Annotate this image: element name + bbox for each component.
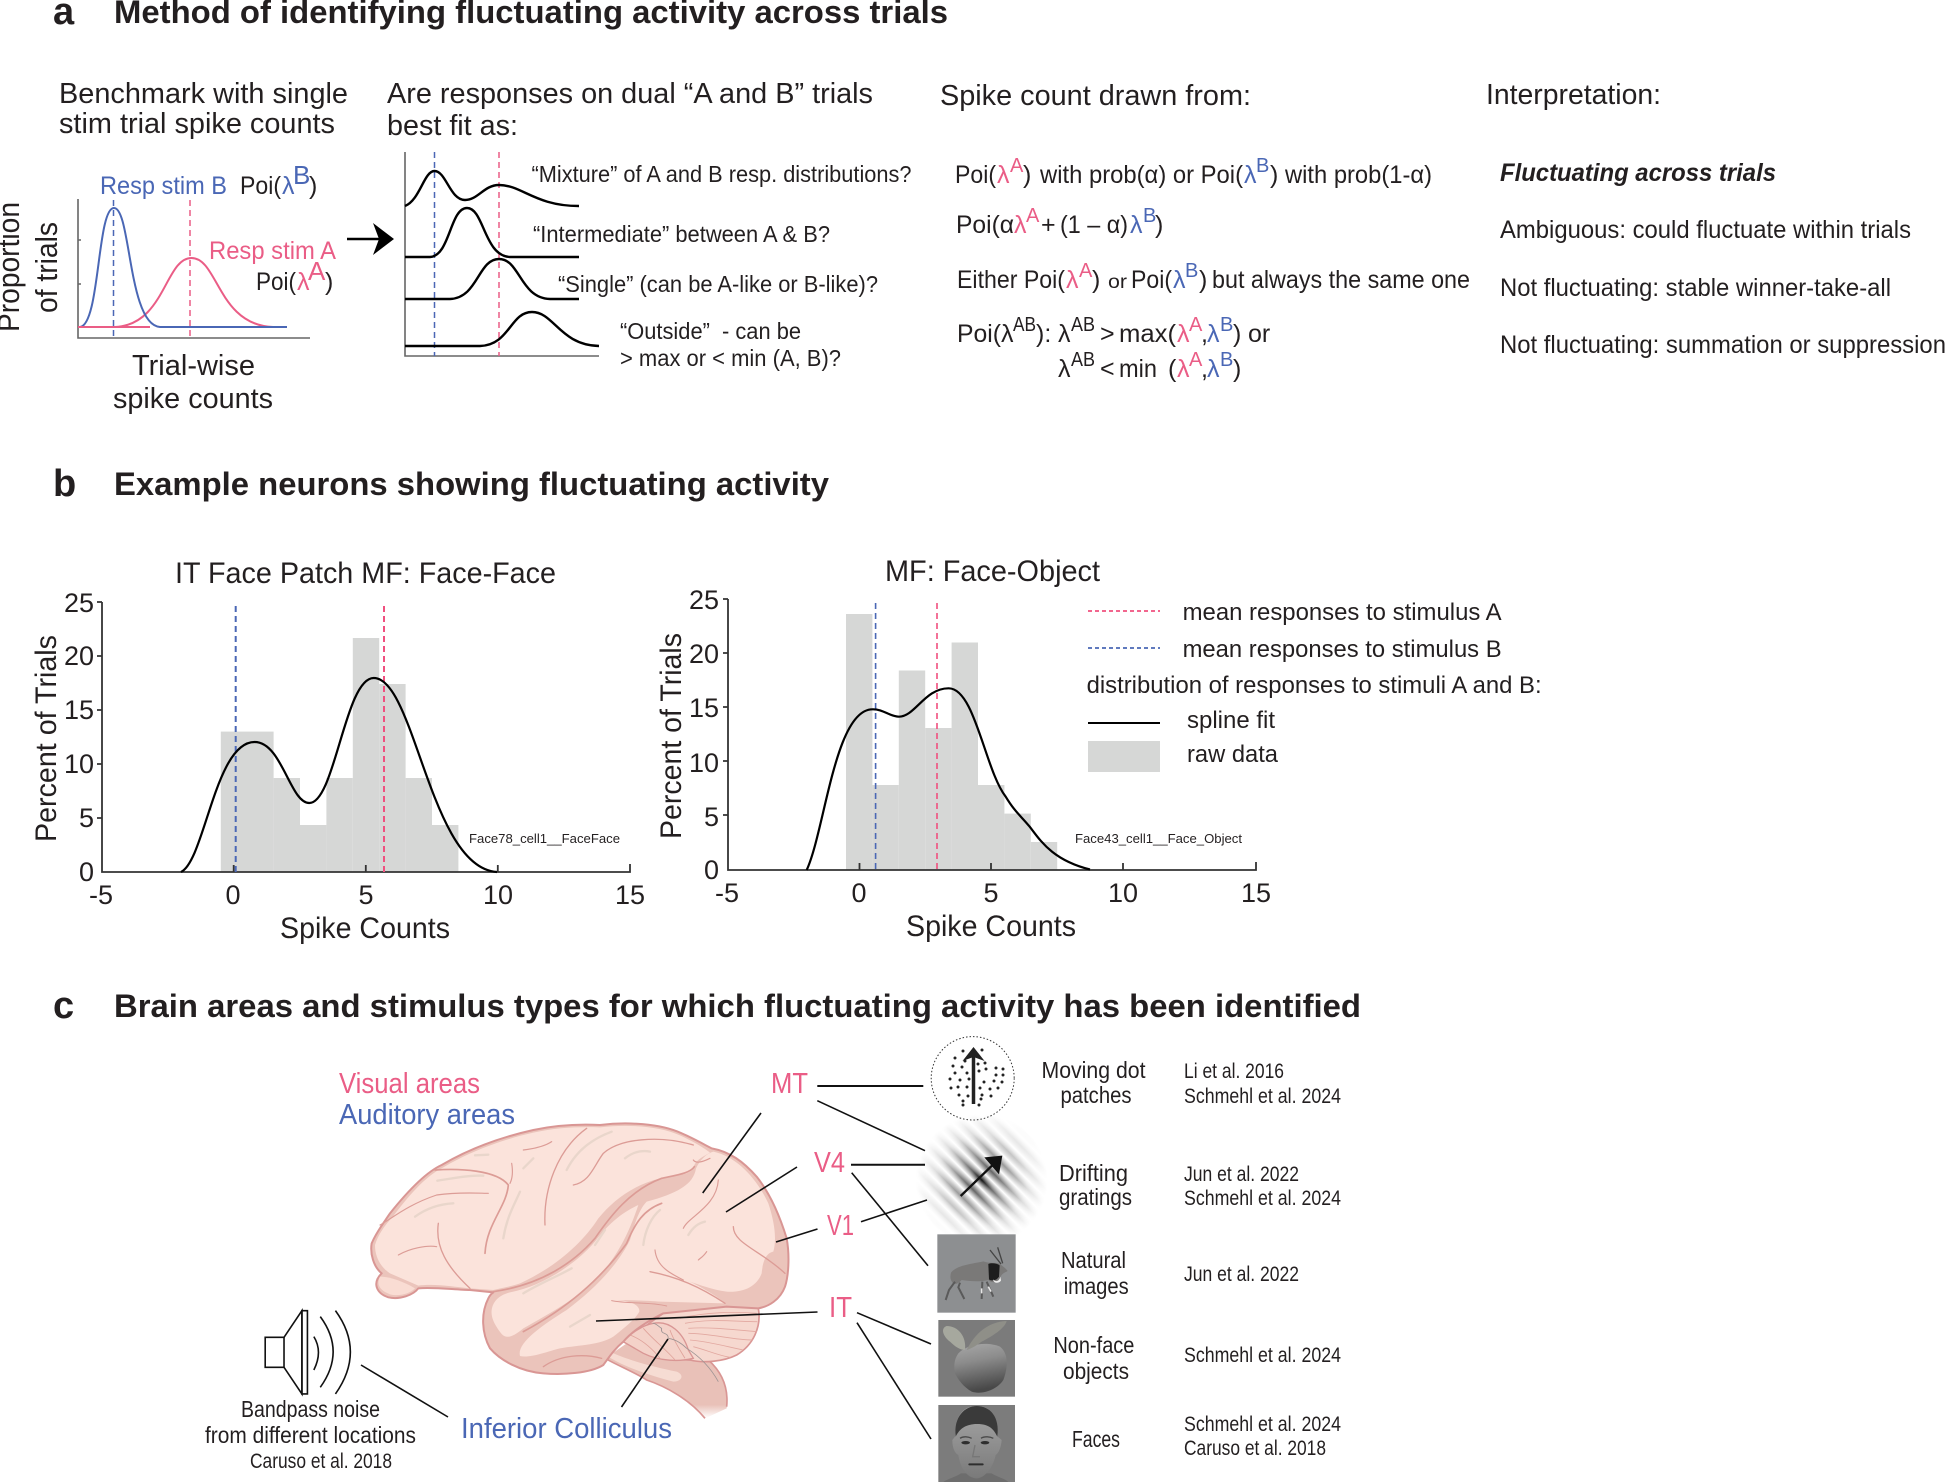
formula: intermediate: (1 – α) xyxy=(1060,211,1128,239)
y tick labels xyxy=(689,585,719,885)
references xyxy=(1184,1060,1341,1460)
formula: outside: AB xyxy=(1071,349,1095,371)
label: resp stim A: λ xyxy=(297,268,310,296)
formula: outside: λ xyxy=(1207,320,1220,348)
area labels: MT xyxy=(771,1068,808,1100)
label: resp stim A: Poi( xyxy=(256,268,297,296)
formula: intermediate: A xyxy=(1026,205,1040,227)
subheading: dual trials: best fit as: xyxy=(387,110,518,142)
hypothesis labels: “Mixture” of A and B resp. distributions? xyxy=(532,161,912,187)
x tick labels: 5 xyxy=(983,878,999,908)
references: Caruso et al. 2018 xyxy=(1184,1437,1326,1460)
label: resp stim B xyxy=(100,160,317,200)
interpretation list xyxy=(1500,159,1946,359)
formula: outside: B xyxy=(1220,314,1233,336)
formula: outside: max( xyxy=(1119,320,1177,348)
panel letter c: c xyxy=(53,985,74,1027)
interpretation list: Not fluctuating: stable winner-take-all xyxy=(1500,274,1891,302)
references: Schmehl et al. 2024 xyxy=(1184,1344,1341,1367)
legend: area colours xyxy=(339,1068,515,1131)
hypothesis labels: “Outside” - can be xyxy=(620,318,801,344)
occipital and temporal regions xyxy=(520,1152,775,1356)
formula: intermediate: Poi(α xyxy=(956,211,1014,239)
label: resp stim A: ) xyxy=(325,268,333,296)
formula: single: ) xyxy=(1092,266,1100,294)
axes xyxy=(97,602,630,872)
formula: outside: AB xyxy=(1013,314,1036,336)
stimulus labels: images xyxy=(1064,1273,1129,1299)
panel: b example neurons xyxy=(30,463,1542,945)
y tick labels: 0 xyxy=(79,857,94,887)
stimulus: non-face object xyxy=(938,1320,1015,1397)
chart: single stimulus distributions xyxy=(78,199,310,338)
label: resp stim B: ) xyxy=(309,172,317,200)
cell id: Face43_cell1__Face_Object xyxy=(1075,831,1242,846)
y axis label: proportion of trials: of trials xyxy=(29,222,64,313)
formula: mixture: with prob(1-α) xyxy=(1284,161,1432,189)
formula: outside: or xyxy=(1248,320,1270,348)
y tick labels xyxy=(64,588,94,887)
interpretation list: Fluctuating across trials xyxy=(1500,159,1776,187)
caption: bandpass noise: from different locations xyxy=(205,1422,416,1448)
chart title: MF: Face-Object xyxy=(885,555,1101,588)
stimulus labels: Natural xyxy=(1061,1247,1126,1273)
stimulus labels: patches xyxy=(1060,1082,1132,1108)
references: Jun et al. 2022 xyxy=(1184,1263,1299,1286)
formula: mixture: A xyxy=(1010,155,1024,177)
formula: single xyxy=(957,260,1470,294)
formula: mixture: with prob(α) or Poi( xyxy=(1039,161,1244,189)
formula: single: B xyxy=(1185,260,1198,282)
references: Schmehl et al. 2024 xyxy=(1184,1187,1341,1210)
stimulus labels: Drifting xyxy=(1059,1160,1128,1186)
formula: outside: λ xyxy=(1207,355,1220,383)
references: Li et al. 2016 xyxy=(1184,1060,1284,1083)
formula: intermediate: B xyxy=(1143,205,1156,227)
y axis title: Percent of Trials xyxy=(30,635,63,842)
formula: outside: , xyxy=(1201,355,1208,383)
y tick labels: 25 xyxy=(64,588,94,618)
formula: intermediate: λ xyxy=(1014,211,1027,239)
y tick labels: 20 xyxy=(689,639,719,669)
area labels: IT xyxy=(829,1292,852,1324)
arrow xyxy=(347,223,394,255)
formula: mixture xyxy=(955,155,1432,189)
connector lines: areas to brain xyxy=(361,1113,818,1417)
y tick labels: 5 xyxy=(79,803,94,833)
area labels xyxy=(771,1068,854,1324)
formula: outside: , xyxy=(1201,320,1208,348)
formula: outside: ) xyxy=(1233,320,1241,348)
formula: outside: B xyxy=(1220,349,1233,371)
legend: mean responses to stimulus A xyxy=(1183,599,1502,626)
label: resp stim A: A xyxy=(308,256,326,286)
x tick labels: -5 xyxy=(715,878,739,908)
area labels: V4 xyxy=(814,1147,845,1179)
stimulus labels: objects xyxy=(1063,1358,1129,1384)
subheading: benchmark xyxy=(59,78,348,140)
caption: bandpass noise xyxy=(205,1396,416,1473)
x tick labels: 15 xyxy=(615,880,645,910)
connector lines: areas to stimuli xyxy=(817,1086,931,1439)
formula: outside: AB xyxy=(1071,314,1095,336)
stimulus labels: Non-face xyxy=(1053,1332,1134,1358)
subheading: interpretation: Interpretation: xyxy=(1486,79,1661,111)
x tick labels: 10 xyxy=(1108,878,1138,908)
formula: outside: λ xyxy=(1177,320,1190,348)
subheading: benchmark: Benchmark with single xyxy=(59,78,348,110)
label: resp stim A xyxy=(209,237,336,296)
chart: face-face histogram xyxy=(30,557,645,945)
formula: outside: λ xyxy=(1058,320,1071,348)
formula: mixture: ) xyxy=(1023,161,1031,189)
formula: mixture: λ xyxy=(997,161,1010,189)
subheading: spike count: Spike count drawn from: xyxy=(940,80,1251,112)
stimulus labels: Moving dot xyxy=(1042,1057,1146,1083)
references: Jun et al. 2022 xyxy=(1184,1163,1299,1186)
formula: outside: min xyxy=(1119,355,1157,383)
y tick labels: 5 xyxy=(704,802,719,832)
hypothesis labels: “Single” (can be A-like or B-like)? xyxy=(558,271,878,297)
y tick labels: 15 xyxy=(64,695,94,725)
caption: bandpass noise: Caruso et al. 2018 xyxy=(250,1450,392,1473)
x tick labels xyxy=(89,880,645,910)
stimulus: face xyxy=(938,1405,1015,1482)
label: resp stim B: Resp stim B xyxy=(100,172,227,200)
x tick labels: 0 xyxy=(225,880,241,910)
stimulus labels: Faces xyxy=(1072,1426,1120,1452)
label: resp stim A: Resp stim A xyxy=(209,237,336,265)
legend: spline fit xyxy=(1187,707,1275,734)
x tick labels: 15 xyxy=(1241,878,1271,908)
y axis title: Percent of Trials xyxy=(655,633,688,839)
chart title: IT Face Patch MF: Face-Face xyxy=(175,557,556,590)
x tick labels: -5 xyxy=(89,880,113,910)
stimulus: moving dots xyxy=(931,1037,1014,1120)
panel letter b: b xyxy=(53,463,76,505)
formula: outside: > xyxy=(1100,320,1115,348)
formula: mixture: ) xyxy=(1270,161,1278,189)
formula: outside: A xyxy=(1189,349,1203,371)
histogram bars xyxy=(221,638,458,872)
axes xyxy=(723,599,1256,870)
x tick labels xyxy=(715,878,1271,908)
formula: outside: ) xyxy=(1233,355,1241,383)
stimulus labels xyxy=(1042,1057,1146,1452)
references: Schmehl et al. 2024 xyxy=(1184,1085,1341,1108)
legend: raw data xyxy=(1187,741,1279,768)
legend xyxy=(1087,599,1542,772)
x tick labels: 5 xyxy=(358,880,374,910)
hypothesis labels xyxy=(532,161,912,371)
stimulus labels: gratings xyxy=(1059,1184,1132,1210)
formula: outside: A xyxy=(1189,314,1203,336)
formula: outside: λ xyxy=(1177,355,1190,383)
panel: a method xyxy=(0,0,1946,415)
formula: single: ) xyxy=(1199,266,1207,294)
y tick labels: 20 xyxy=(64,641,94,671)
x axis label: trial-wise spike counts: Trial-wise xyxy=(132,350,255,382)
subheading: benchmark: stim trial spike counts xyxy=(59,108,335,140)
chart: dual trial hypotheses xyxy=(405,152,599,356)
x tick labels: 10 xyxy=(483,880,513,910)
x axis title: Spike Counts xyxy=(906,910,1076,943)
x tick labels: 0 xyxy=(851,878,867,908)
formula: outside: Poi( xyxy=(957,320,1002,348)
formula: outside: ( xyxy=(1168,355,1177,383)
formula: intermediate: ) xyxy=(1155,211,1163,239)
formula: mixture: λ xyxy=(1244,161,1257,189)
spline fit xyxy=(181,678,497,872)
formula: single: λ xyxy=(1173,266,1186,294)
x axis label: trial-wise spike counts xyxy=(113,350,273,415)
y tick labels: 10 xyxy=(64,749,94,779)
mean lines xyxy=(236,606,384,872)
stimulus: drifting grating xyxy=(920,1119,1042,1234)
formula: mixture: Poi( xyxy=(955,161,997,189)
formula: outside: λ xyxy=(1001,320,1014,348)
x axis title: Spike Counts xyxy=(280,912,450,945)
heading c: Brain areas and stimulus types for which fluctuating activity has been identified xyxy=(114,988,1361,1024)
x axis label: trial-wise spike counts: spike counts xyxy=(113,383,273,415)
sulci xyxy=(380,1128,785,1367)
formula: single: Poi( xyxy=(1131,266,1173,294)
formula: outside: λ xyxy=(1058,355,1071,383)
subheading: dual trials xyxy=(387,78,873,142)
y axis label: proportion of trials xyxy=(0,202,64,332)
formula: single: Either Poi( xyxy=(957,266,1066,294)
formula: outside xyxy=(957,314,1270,383)
label: resp stim B: B xyxy=(293,160,310,190)
legend: distribution of responses to stimuli A and B: xyxy=(1087,672,1542,699)
caption: bandpass noise: Bandpass noise xyxy=(241,1396,380,1422)
hypothesis labels: > max or < min (A, B)? xyxy=(620,345,841,371)
cell id: Face78_cell1__FaceFace xyxy=(469,831,620,846)
formula: outside: < xyxy=(1100,355,1115,383)
legend: area colours: Auditory areas xyxy=(339,1099,515,1131)
formula: single: A xyxy=(1079,260,1093,282)
label: resp stim B: λ xyxy=(282,172,295,200)
label: inferior colliculus: Inferior Colliculus xyxy=(461,1413,672,1445)
cerebrum silhouette xyxy=(371,1123,788,1374)
y tick labels: 10 xyxy=(689,748,719,778)
illustration: brain xyxy=(371,1123,788,1418)
legend: area colours: Visual areas xyxy=(339,1068,480,1100)
heading b: Example neurons showing fluctuating activity xyxy=(114,466,829,502)
y tick labels: 15 xyxy=(689,693,719,723)
formula: intermediate xyxy=(956,205,1163,239)
mean lines xyxy=(876,603,937,870)
area labels: V1 xyxy=(827,1210,854,1242)
spline fit xyxy=(807,688,1090,870)
formula: intermediate: λ xyxy=(1130,211,1143,239)
panel: c brain areas xyxy=(53,985,1361,1482)
histogram bars xyxy=(846,614,1057,870)
stimulus: natural image xyxy=(937,1234,1016,1313)
references: Schmehl et al. 2024 xyxy=(1184,1413,1341,1436)
interpretation list: Ambiguous: could fluctuate within trials xyxy=(1500,216,1911,244)
formula: single: or xyxy=(1108,272,1128,293)
legend: mean responses to stimulus B xyxy=(1183,636,1502,663)
label: resp stim B: Poi( xyxy=(240,172,282,200)
y tick labels: 25 xyxy=(689,585,719,615)
formula: single: but always the same one xyxy=(1212,266,1470,294)
y tick labels: 0 xyxy=(704,855,719,885)
formula: single: λ xyxy=(1066,266,1079,294)
hypothesis labels: “Intermediate” between A & B? xyxy=(533,221,830,247)
icon: speaker xyxy=(265,1311,350,1394)
chart: face-object histogram xyxy=(655,555,1271,943)
formula: outside: ): xyxy=(1036,320,1051,348)
subheading: dual trials: Are responses on dual “A and B” trials xyxy=(387,78,873,110)
frontal and parietal lobes xyxy=(375,1126,710,1290)
formula: mixture: B xyxy=(1256,155,1269,177)
formula: intermediate: + xyxy=(1041,211,1056,239)
